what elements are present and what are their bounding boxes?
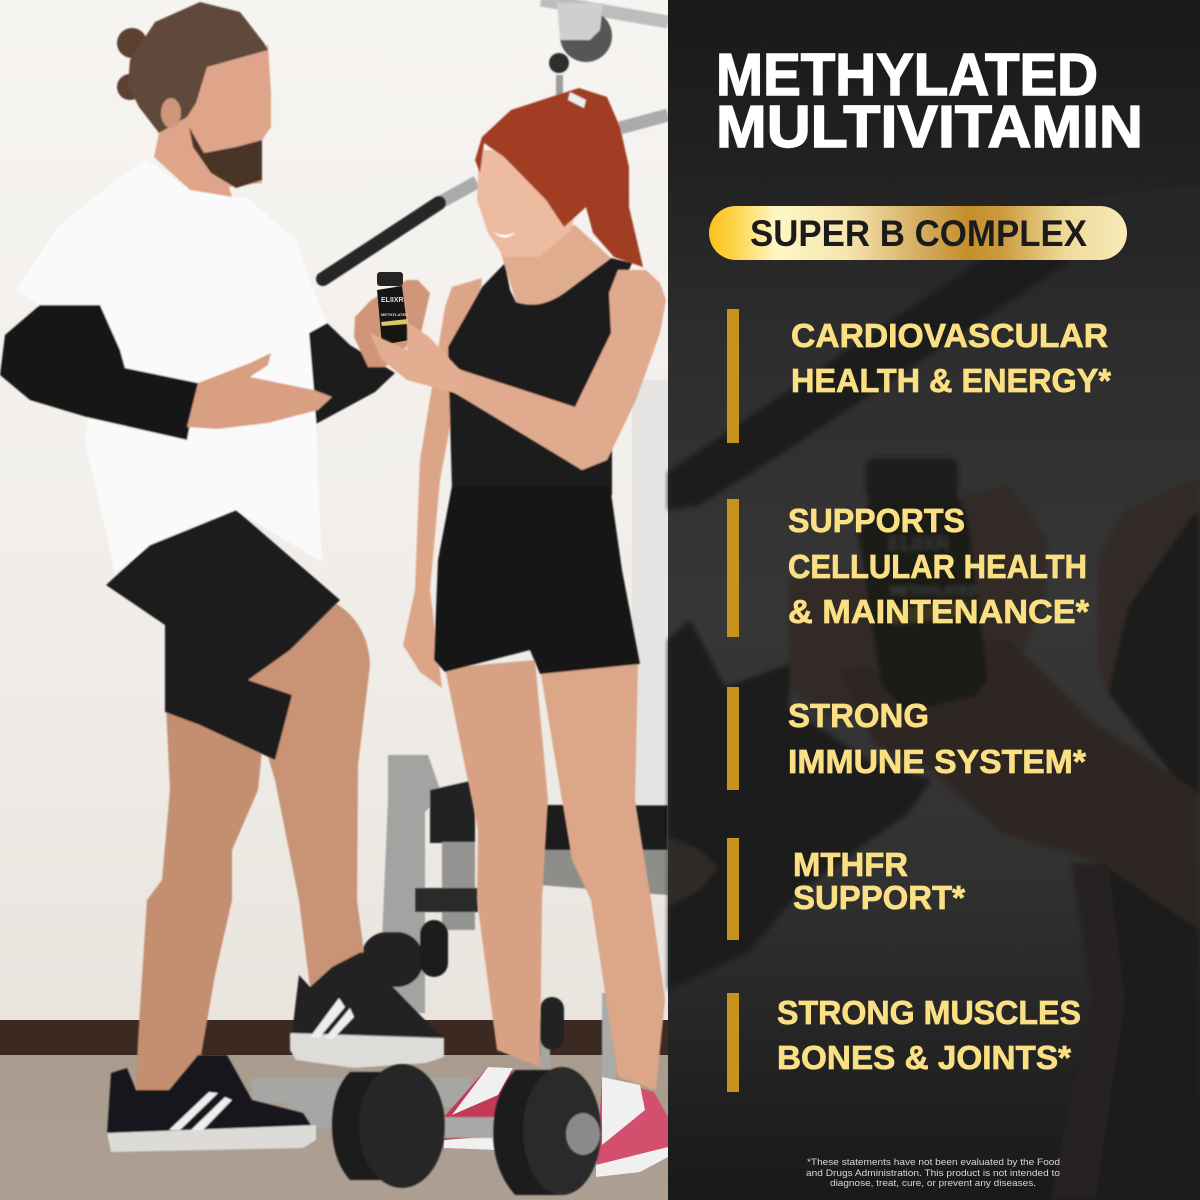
benefit: cellular health: & MAINTENANCE* [788, 593, 1089, 630]
woman's smile [493, 232, 516, 238]
gym equipment [252, 0, 668, 1130]
woman's tank top [448, 258, 632, 495]
woman's right arm [450, 270, 666, 470]
benefit: cardiovascular health: CARDIOVASCULAR [791, 317, 1108, 354]
title [716, 42, 1143, 160]
panel background [668, 0, 1200, 1200]
woman's hair [475, 88, 643, 267]
title: MULTIVITAMIN [716, 94, 1143, 160]
man's near sleeve [0, 305, 198, 440]
benefit: muscles bones joints [727, 993, 1081, 1092]
benefit: immune system: IMMUNE SYSTEM* [788, 743, 1086, 780]
benefit: immune system [727, 687, 1086, 790]
faded background photo [668, 185, 1200, 1200]
baseboard [0, 1020, 668, 1056]
man's head [117, 2, 271, 197]
benefit: immune system: STRONG [788, 697, 929, 734]
gold pill: super b complex: SUPER B COMPLEX [750, 213, 1087, 254]
man's open hand [187, 353, 332, 429]
disclaimer: *These statements have not been evaluated by the Food [807, 1157, 1060, 1168]
benefit: cardiovascular health [727, 309, 1111, 443]
floor [0, 1055, 668, 1200]
disclaimer [806, 1157, 1060, 1189]
man's raised leg [248, 600, 370, 987]
sneaker highlights [444, 1067, 513, 1150]
product bottle: ELIIXR [381, 297, 404, 304]
woman's hand on bottle [370, 322, 465, 395]
product bottle: METHYLATED [381, 312, 408, 317]
benefit: mthfr support [727, 838, 965, 940]
benefit: cardiovascular health: HEALTH & ENERGY* [791, 362, 1111, 399]
woman's front leg [540, 660, 665, 1090]
faded bottle [858, 458, 988, 712]
woman's back sneaker [444, 1067, 513, 1150]
wall background [0, 0, 668, 1025]
faded bottle: METHYLATED [890, 583, 978, 598]
woman's shorts [434, 486, 640, 674]
man's standing shoe [107, 1055, 312, 1135]
disclaimer: diagnose, treat, cure, or prevent any diseases. [830, 1178, 1036, 1189]
person: woman [403, 88, 666, 1090]
man's hand holding bottle [354, 280, 430, 367]
dumbbell [332, 1064, 601, 1195]
benefit: cellular health: CELLULAR HEALTH [788, 548, 1087, 585]
woman's front sneaker [596, 1077, 668, 1175]
benefit: muscles bones joints: STRONG MUSCLES [777, 994, 1081, 1031]
man's raised shoe [292, 952, 442, 1037]
benefit: cellular health [727, 499, 1089, 637]
product bottle [377, 272, 409, 345]
title: METHYLATED [716, 42, 1098, 108]
man's shirt [15, 159, 327, 573]
benefit: cellular health: SUPPORTS [788, 502, 965, 539]
benefit: mthfr support: MTHFR [793, 846, 908, 883]
benefit: muscles bones joints: BONES & JOINTS* [777, 1039, 1071, 1076]
faded bottle: ELIIXR [888, 534, 950, 555]
woman's back leg [445, 660, 548, 1067]
man's shorts [106, 510, 340, 760]
front sneaker highlights [596, 1077, 668, 1177]
man's far sleeve [309, 323, 395, 425]
panel: dark benefits column [668, 0, 1200, 1200]
woman's left arm [403, 278, 482, 688]
benefit: mthfr support: SUPPORT* [793, 879, 965, 916]
hair tie [568, 92, 586, 108]
panel: gym photo [0, 0, 668, 1200]
gold pill: super b complex [709, 206, 1127, 260]
person: man [0, 2, 444, 1152]
woman's neck [500, 225, 611, 305]
woman's face [477, 150, 579, 257]
disclaimer: and Drugs Administration. This product is not intended to [806, 1168, 1060, 1179]
man's standing leg [136, 705, 262, 1090]
